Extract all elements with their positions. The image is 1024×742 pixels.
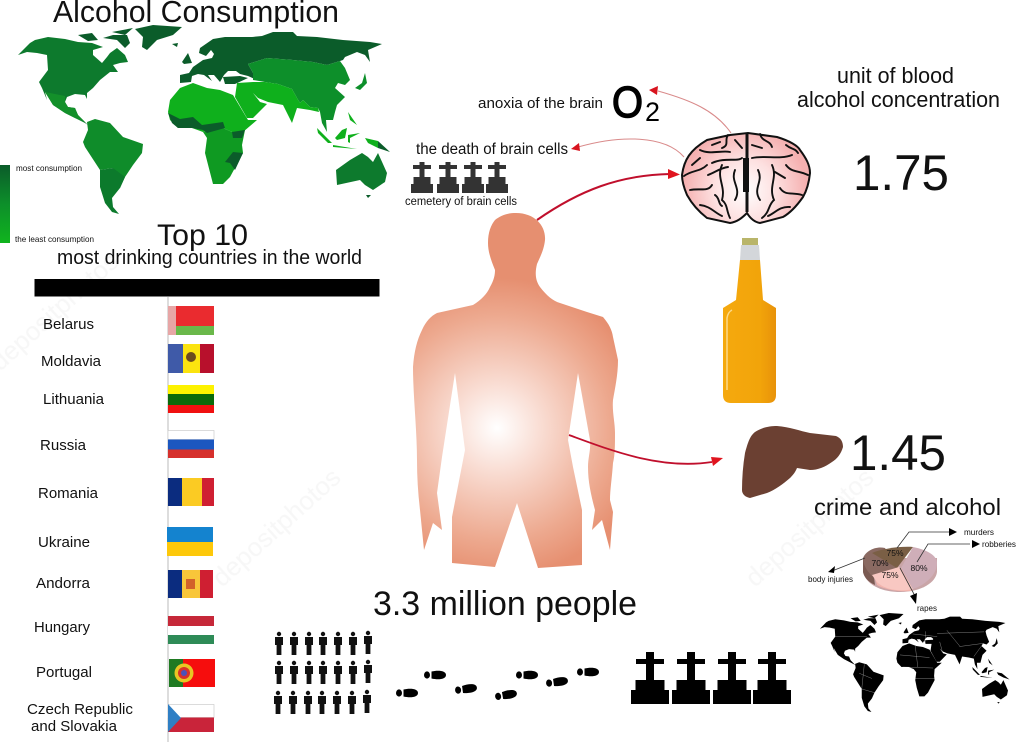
flag: Andorra bbox=[168, 570, 213, 598]
pie chart: crime and alcohol bbox=[863, 547, 937, 592]
text: 3.3 million people: 3.3 million people bbox=[373, 585, 637, 623]
icon: tombstones bbox=[631, 652, 791, 704]
O2 symbol: O bbox=[612, 78, 643, 127]
flag: Hungary bbox=[168, 616, 214, 644]
country list: Belarus bbox=[43, 316, 94, 333]
icon: crowd of people bbox=[274, 631, 372, 714]
country list: Ukraine bbox=[38, 534, 90, 551]
black header bar bbox=[34, 279, 380, 296]
legend: consumption scale: most consumption bbox=[16, 163, 82, 173]
text: unit of blood alcohol concentration: unit of blood bbox=[837, 63, 954, 88]
pie chart: crime and alcohol: 75% bbox=[886, 548, 904, 558]
number: 1.75: 1.75 bbox=[853, 145, 949, 201]
icon: brain bbox=[682, 133, 810, 223]
heading: Top 10: Top 10 bbox=[157, 219, 248, 252]
country list: Czech Republic bbox=[27, 701, 133, 718]
arrow: brain to O2 bbox=[649, 86, 731, 133]
world map: alcohol consumption bbox=[18, 25, 390, 214]
flag: Ukraine bbox=[167, 527, 213, 556]
arrow: body to liver bbox=[569, 435, 723, 466]
country list: Hungary bbox=[34, 619, 90, 636]
pie chart: crime and alcohol: 75% bbox=[881, 570, 899, 580]
flag: Belarus bbox=[168, 306, 214, 335]
country list: Romania bbox=[38, 485, 99, 502]
country list: Russia bbox=[40, 437, 87, 454]
human body silhouette bbox=[413, 213, 618, 568]
legend: consumption scale: the least consumption bbox=[15, 234, 94, 244]
heading: crime and alcohol: crime and alcohol bbox=[814, 494, 1001, 520]
text: cemetery of brain cells: cemetery of brain cells bbox=[405, 196, 517, 208]
pie labels and arrows: robberies bbox=[982, 539, 1016, 549]
text: unit of blood alcohol concentration bbox=[797, 63, 1000, 112]
pie chart: crime and alcohol: 80% bbox=[910, 563, 928, 573]
country list: Andorra bbox=[36, 575, 91, 592]
country list bbox=[27, 297, 168, 742]
flag: Portugal bbox=[169, 659, 215, 687]
O2 symbol: 2 bbox=[645, 97, 660, 127]
flag: Russia bbox=[168, 430, 214, 458]
text: the death of brain cells: the death of brain cells bbox=[416, 141, 568, 158]
number: 1.45: 1.45 bbox=[850, 425, 946, 481]
pie labels and arrows: rapes bbox=[917, 603, 937, 613]
country list: Portugal bbox=[36, 664, 92, 681]
arrow: brain to brain cells bbox=[571, 139, 684, 157]
pie labels and arrows bbox=[808, 527, 1016, 613]
text: anoxia of the brain: anoxia of the brain bbox=[478, 95, 603, 112]
country list: and Slovakia bbox=[31, 718, 118, 735]
pie chart: crime and alcohol: 70% bbox=[871, 558, 889, 568]
legend: consumption scale bbox=[0, 163, 94, 244]
icon: bottle bbox=[723, 238, 776, 403]
flag: Romania bbox=[168, 478, 214, 506]
pie labels and arrows: body injuries bbox=[808, 574, 853, 584]
country list: Moldavia bbox=[41, 353, 102, 370]
watermark: depositphotos bbox=[739, 462, 879, 592]
icon: liver bbox=[742, 426, 843, 498]
country list: Lithuania bbox=[43, 391, 105, 408]
watermark bbox=[0, 246, 879, 592]
heading: Top 10: most drinking countries in the world bbox=[57, 247, 362, 269]
icon: footprints bbox=[396, 668, 599, 701]
icon: cemetery of brain cells bbox=[411, 162, 508, 193]
watermark: depositphotos bbox=[206, 462, 346, 592]
arrow: head to brain bbox=[537, 169, 680, 220]
flag: Lithuania bbox=[168, 385, 214, 413]
flag: Moldavia bbox=[168, 344, 214, 373]
watermark: depositphotos bbox=[489, 246, 629, 376]
pie labels and arrows: murders bbox=[964, 527, 994, 537]
black world map bbox=[820, 613, 1010, 712]
heading: Top 10 bbox=[57, 219, 362, 269]
flag: Czech Republic bbox=[168, 704, 214, 732]
text: unit of blood alcohol concentration: alcohol concentration bbox=[797, 87, 1000, 112]
